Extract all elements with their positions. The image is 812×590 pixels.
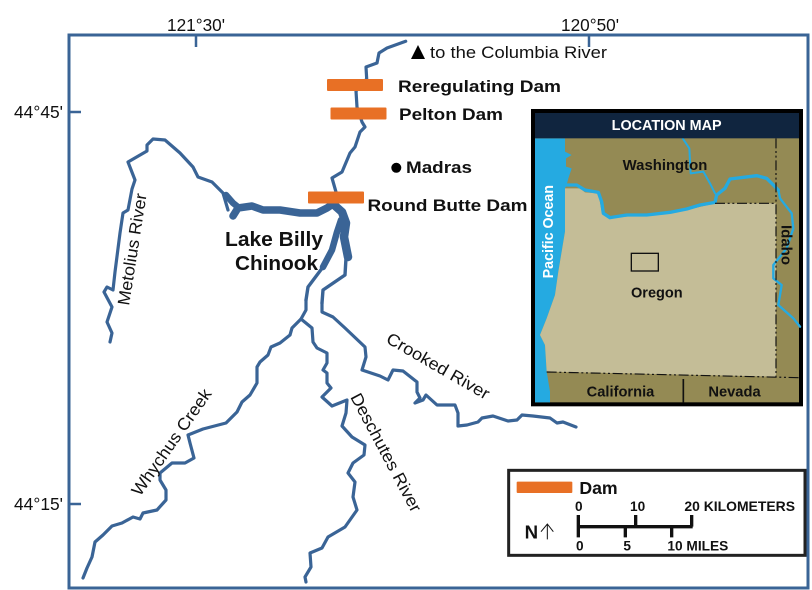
north arrow: N — [525, 521, 538, 542]
mile labels: 0 — [576, 539, 584, 554]
label: Reregulating Dam: Reregulating Dam — [398, 77, 561, 96]
label: to the Columbia River: to the Columbia River — [430, 43, 607, 62]
kilometer labels: 10 — [630, 499, 646, 514]
kilometer labels: 0 — [575, 499, 583, 514]
state borders — [547, 138, 799, 403]
label: Pelton Dam: Pelton Dam — [399, 105, 503, 124]
label: Deschutes River: Deschutes River — [346, 390, 425, 516]
graticule ticks and coordinates: 44°45' — [14, 102, 63, 122]
label: Lake Billy Chinook — [225, 228, 324, 275]
reservoir: Lake Billy Chinook — [226, 195, 348, 303]
graticule ticks and coordinates: 121°30' — [167, 15, 225, 35]
graticule ticks and coordinates: 44°15' — [14, 494, 63, 514]
legend box — [509, 470, 805, 555]
river: Deschutes north of the dams — [332, 41, 406, 192]
icon: triangle toward the Columbia River — [411, 45, 425, 59]
label: Round Butte Dam: Round Butte Dam — [368, 196, 528, 215]
label: Madras: Madras — [406, 158, 472, 177]
label: Lake Billy Chinook: Lake Billy — [225, 228, 324, 251]
icon: Madras town dot — [391, 163, 401, 173]
legend label: Dam: Dam — [579, 478, 618, 498]
label: Whychus Creek: Whychus Creek — [128, 385, 216, 499]
state label: Idaho: Idaho — [778, 225, 795, 265]
panel: legend and scale bar — [509, 470, 805, 555]
state label: California: California — [587, 384, 655, 401]
river: Crooked — [322, 303, 576, 427]
label: Lake Billy Chinook: Chinook — [235, 252, 319, 275]
graticule ticks and coordinates — [14, 15, 619, 514]
panel: location map inset — [533, 111, 801, 404]
inset header — [535, 113, 799, 138]
dam: Round Butte — [308, 192, 364, 204]
river: Whychus Creek — [83, 300, 306, 578]
state label: Nevada: Nevada — [708, 384, 761, 401]
label: Pacific Ocean: Pacific Ocean — [540, 185, 557, 278]
state label: Oregon: Oregon — [631, 284, 683, 301]
dam: Pelton — [330, 108, 386, 120]
river: Metolius — [104, 139, 228, 342]
label: Crooked River: Crooked River — [383, 329, 493, 404]
inset land background — [533, 111, 801, 404]
north arrow — [525, 521, 553, 542]
label: Metolius River: Metolius River — [114, 192, 151, 307]
study area box — [631, 253, 658, 271]
dam: Reregulating — [327, 79, 383, 91]
inset rivers — [565, 138, 800, 327]
scale bar — [578, 515, 693, 537]
mile labels: 10 MILES — [667, 539, 728, 554]
header text: LOCATION MAP — [612, 118, 722, 134]
state label: Washington: Washington — [623, 157, 707, 174]
river: Deschutes — [301, 319, 365, 582]
mile labels — [576, 539, 728, 554]
kilometer labels — [575, 499, 795, 514]
legend swatch: dam — [517, 482, 572, 493]
ocean — [535, 138, 572, 402]
Oregon state — [540, 188, 776, 377]
kilometer labels: 20 KILOMETERS — [684, 499, 795, 514]
mile labels: 5 — [623, 539, 631, 554]
graticule ticks and coordinates: 120°50' — [561, 15, 619, 35]
